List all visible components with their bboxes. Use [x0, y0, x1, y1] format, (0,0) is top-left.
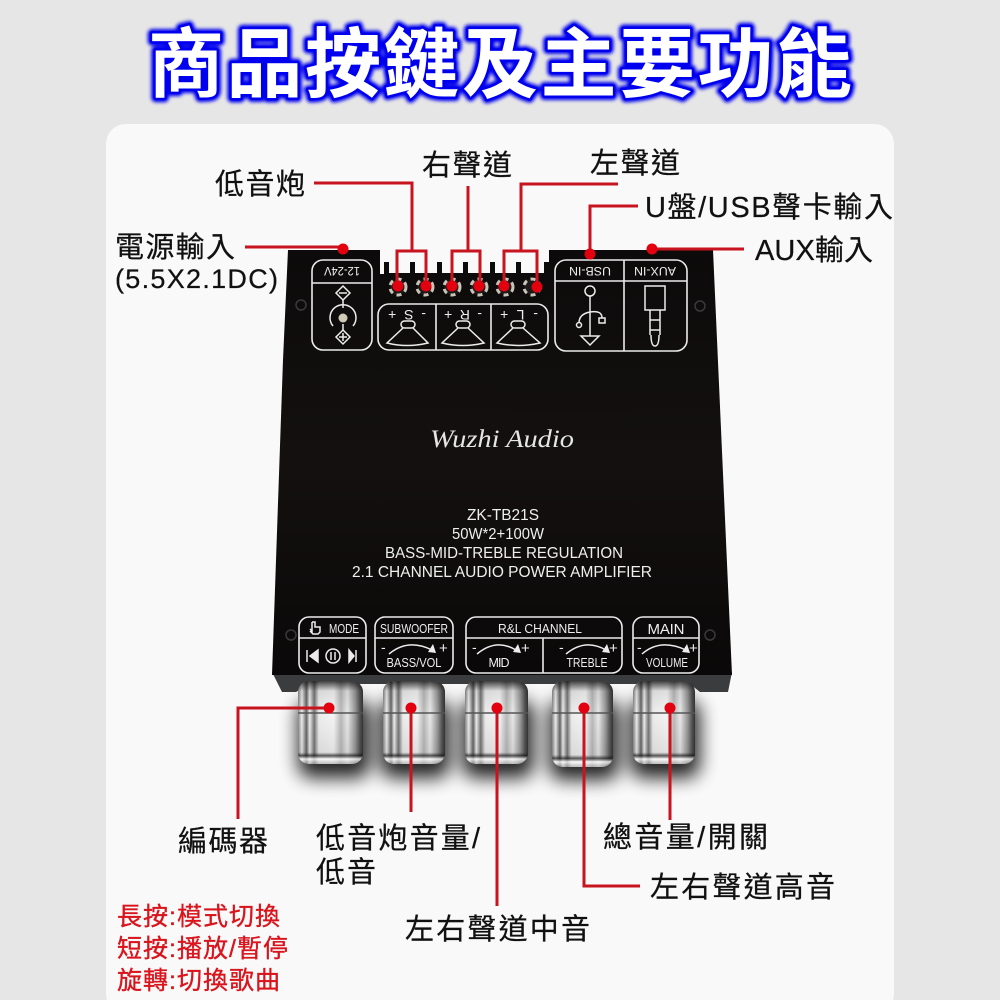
callout lines: terminals and inputs: [245, 183, 744, 292]
R and L channel panel: +: [521, 640, 530, 657]
speaker outputs panel: - R +: [444, 307, 482, 323]
encoder instructions: [117, 903, 288, 995]
title: 商品按鍵及主要功能: [148, 23, 852, 108]
encoder instructions: 旋轉:切換歌曲: [117, 967, 280, 995]
mode panel: MODE: [329, 622, 359, 636]
label: left channel: 左聲道: [590, 147, 680, 180]
model text block: BASS-MID-TREBLE REGULATION: [385, 545, 623, 562]
title: 商品按鍵及主要功能: [148, 23, 852, 108]
R and L channel panel: -: [472, 639, 477, 655]
R and L channel panel: [466, 617, 622, 673]
R and L channel panel: +: [609, 640, 618, 657]
screw terminals: [390, 279, 540, 295]
main volume panel: [633, 617, 699, 673]
R and L channel panel: -: [559, 639, 564, 655]
power input panel: 12-24V: [324, 264, 360, 278]
label: subwoofer volume: 低音炮音量/: [316, 822, 481, 855]
subwoofer panel: -: [381, 639, 386, 655]
label: main volume and power: 總音量/開關: [603, 821, 768, 854]
label: subwoofer volume: 低音: [316, 856, 376, 889]
knob shadows: [298, 700, 700, 780]
label: power input: (5.5X2.1DC): [115, 264, 278, 294]
label: treble: 左右聲道高音: [650, 871, 835, 904]
speaker outputs panel: [378, 304, 548, 350]
plate body: [272, 250, 732, 675]
encoder instructions: 短按:播放/暫停: [117, 935, 288, 963]
USB and AUX panel: [555, 260, 687, 351]
R and L channel panel: R&L CHANNEL: [498, 622, 582, 636]
subwoofer panel: +: [439, 640, 448, 657]
encoder instructions: 長按:模式切換: [117, 903, 280, 931]
main volume panel: +: [689, 640, 698, 657]
label: right channel: 右聲道: [422, 149, 512, 182]
speaker outputs panel: - S +: [388, 307, 426, 323]
USB and AUX panel: USB-IN: [569, 264, 611, 278]
amplifier device: [272, 250, 732, 780]
brand logo: Wuzhi Audio: [430, 426, 574, 453]
label: power input: 電源輸入: [115, 231, 235, 264]
panel: white background card: [106, 124, 894, 1000]
model text block: 2.1 CHANNEL AUDIO POWER AMPLIFIER: [352, 564, 652, 581]
label: subwoofer: 低音炮: [215, 168, 305, 201]
main volume panel: -: [637, 639, 642, 655]
mode panel: [299, 617, 366, 673]
corner screws: [286, 300, 715, 640]
label: encoder: 編碼器: [178, 825, 268, 858]
label: AUX input: AUX輸入: [755, 234, 873, 267]
subwoofer panel: BASS/VOL: [386, 656, 442, 670]
label: mid: 左右聲道中音: [405, 913, 590, 946]
title: 商品按鍵及主要功能: [148, 23, 852, 108]
R and L channel panel: TREBLE: [566, 656, 608, 670]
knobs: [298, 681, 695, 767]
model text block: 50W*2+100W: [452, 526, 544, 543]
callout lines: knobs: [238, 702, 676, 906]
label: power input: [115, 231, 278, 294]
label: USB input: U盤/USB聲卡輸入: [645, 191, 893, 224]
label: subwoofer volume: [316, 822, 481, 889]
model text block: ZK-TB21S: [467, 507, 539, 524]
subwoofer panel: SUBWOOFER: [380, 621, 448, 636]
side strip under plate: [272, 672, 732, 692]
USB and AUX panel: AUX-IN: [634, 264, 676, 278]
model text block: [352, 507, 652, 581]
main volume panel: MAIN: [648, 621, 684, 638]
main volume panel: VOLUME: [646, 656, 688, 670]
subwoofer panel: [375, 617, 453, 673]
speaker outputs panel: - L +: [500, 307, 538, 323]
R and L channel panel: MID: [488, 656, 510, 670]
power input panel: [312, 260, 372, 350]
